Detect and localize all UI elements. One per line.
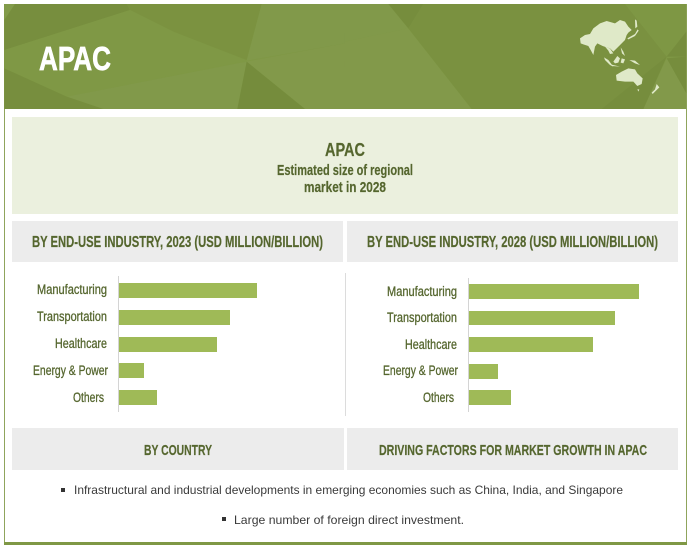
header: end-use industry 2023 [12, 221, 343, 262]
bar: Energy & Power 2023: Energy & Power [33, 363, 108, 378]
panel subheading line 2: market in 2028 [304, 179, 386, 196]
bullet: foreign investment: Large number of foreign direct investment. [234, 513, 464, 527]
bar: Healthcare 2028: Healthcare [405, 337, 457, 352]
bar chart: 2023 [33, 276, 257, 412]
bar: Others 2028: Others [423, 390, 454, 405]
header: by country [12, 428, 344, 470]
panel heading: APAC [325, 140, 365, 160]
bar: Energy & Power 2028: Energy & Power [383, 363, 458, 378]
bullet: infrastructure: Infrastructural and industrial developments in emerging economies such as China, India, and Singapore [74, 483, 623, 497]
bar: Healthcare 2023: Healthcare [55, 336, 107, 351]
header: driving factors [347, 428, 678, 470]
bar: Others 2028 [423, 390, 511, 405]
bar: Manufacturing 2023: Manufacturing [37, 282, 107, 297]
bar: Manufacturing 2028 [387, 284, 639, 299]
bar chart: 2028 [383, 278, 639, 412]
bar: Others 2023: Others [73, 390, 104, 405]
header: by country: BY COUNTRY [144, 442, 212, 459]
icon: APAC map [580, 19, 659, 94]
bar: Transportation 2023: Transportation [37, 309, 107, 324]
bar: Healthcare 2028 [405, 337, 593, 352]
bar: Others 2023 [73, 390, 157, 405]
header: end-use industry 2028 [347, 221, 678, 262]
bar: Manufacturing 2023 [37, 282, 257, 298]
panel subheading line 1: Estimated size of regional [277, 162, 413, 179]
bar: Manufacturing 2028: Manufacturing [387, 284, 457, 299]
header: end-use industry 2023: BY END-USE INDUSTRY, 2023 (USD MILLION/BILLION) [32, 234, 323, 251]
bar: Healthcare 2023 [55, 336, 217, 352]
bar: Transportation 2023 [37, 309, 230, 325]
banner [4, 4, 686, 109]
title: APAC [39, 40, 111, 77]
bar: Transportation 2028: Transportation [387, 310, 457, 325]
bar: Transportation 2028 [387, 310, 615, 325]
panel: regional market size [12, 117, 678, 214]
